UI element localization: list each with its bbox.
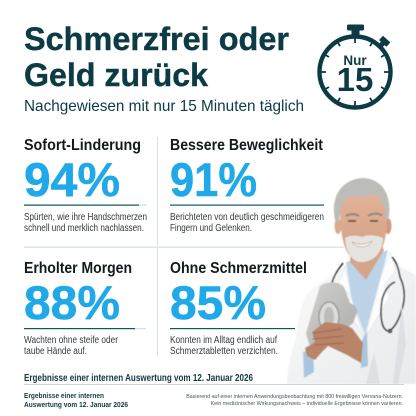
title: Geld zurück <box>24 57 208 93</box>
panel: Ohne Schmerzmittel: Konnten im Alltag endlich auf <box>170 335 277 346</box>
panel: Bessere Beweglichkeit: Fingern und Gelenken. <box>170 223 252 234</box>
face <box>340 184 387 260</box>
footer source: Ergebnisse einer internen <box>24 391 104 400</box>
smile <box>352 241 372 247</box>
panel: Sofort-Linderung: 94% <box>24 153 120 206</box>
coat <box>287 258 416 384</box>
blue cuff <box>303 348 314 378</box>
panel: Sofort-Linderung <box>24 137 147 234</box>
panel: Bessere Beweglichkeit: 91% <box>170 153 257 206</box>
illustration: doctor with hand device <box>287 178 416 384</box>
footer source: Auswertung vom 12. Januar 2026 <box>24 400 128 409</box>
eyes <box>348 220 378 222</box>
panel: Sofort-Linderung: Sofort-Linderung <box>24 137 141 154</box>
ears <box>334 218 342 234</box>
vertical divider <box>157 137 158 356</box>
device <box>306 282 357 351</box>
icon: stopwatch: Nur <box>343 53 367 68</box>
panel: Ohne Schmerzmittel <box>170 260 307 357</box>
subtitle: Nachgewiesen mit nur 15 Minuten täglich <box>24 98 304 115</box>
title: Schmerzfrei oder <box>24 21 289 57</box>
hand <box>305 322 363 363</box>
hair <box>334 178 389 222</box>
title <box>24 21 289 93</box>
stethoscope <box>331 257 404 331</box>
coat folds <box>366 305 406 384</box>
lapels <box>338 252 396 338</box>
panel: Ohne Schmerzmittel: 85% <box>170 276 266 329</box>
brows <box>346 214 382 216</box>
icon: stopwatch <box>319 24 391 108</box>
icon: stopwatch: 15 <box>337 61 373 98</box>
beard <box>345 235 383 262</box>
panel: Erholter Morgen: taube Hände auf. <box>24 346 87 357</box>
panel: Bessere Beweglichkeit: Bessere Beweglichkeit <box>170 137 323 154</box>
footer disclaimer: Kein medizinischer Wirkungsnachweis – individuelle Ergebnisse können variieren. <box>211 401 403 407</box>
panel: Bessere Beweglichkeit <box>170 137 324 234</box>
panel: Sofort-Linderung: Spürten, wie ihre Handschmerzen <box>24 212 147 223</box>
footer disclaimer: Basierend auf einer internen Anwendungsbeobachtung mit 800 freiwilligen Vervana-Nutzern. <box>186 394 403 400</box>
panel: Bessere Beweglichkeit: Berichteten von deutlich geschmeidigeren <box>170 212 324 223</box>
panel: Ohne Schmerzmittel: Ohne Schmerzmittel <box>170 260 307 277</box>
horizontal divider <box>24 246 344 248</box>
panel: Sofort-Linderung: schnell und merklich nachlassen. <box>24 223 144 234</box>
shirt <box>346 250 388 334</box>
panel: Erholter Morgen: 88% <box>24 276 120 329</box>
panel: Erholter Morgen <box>24 260 146 357</box>
neck <box>350 244 384 280</box>
footer rule <box>24 384 404 385</box>
panel: Ohne Schmerzmittel: Schmerztabletten verzichten. <box>170 346 278 357</box>
summary line: Ergebnisse einer internen Auswertung vom 12. Januar 2026 <box>24 372 253 384</box>
panel: Erholter Morgen: Wachten ohne steife oder <box>24 335 119 346</box>
panel: Erholter Morgen: Erholter Morgen <box>24 260 132 277</box>
